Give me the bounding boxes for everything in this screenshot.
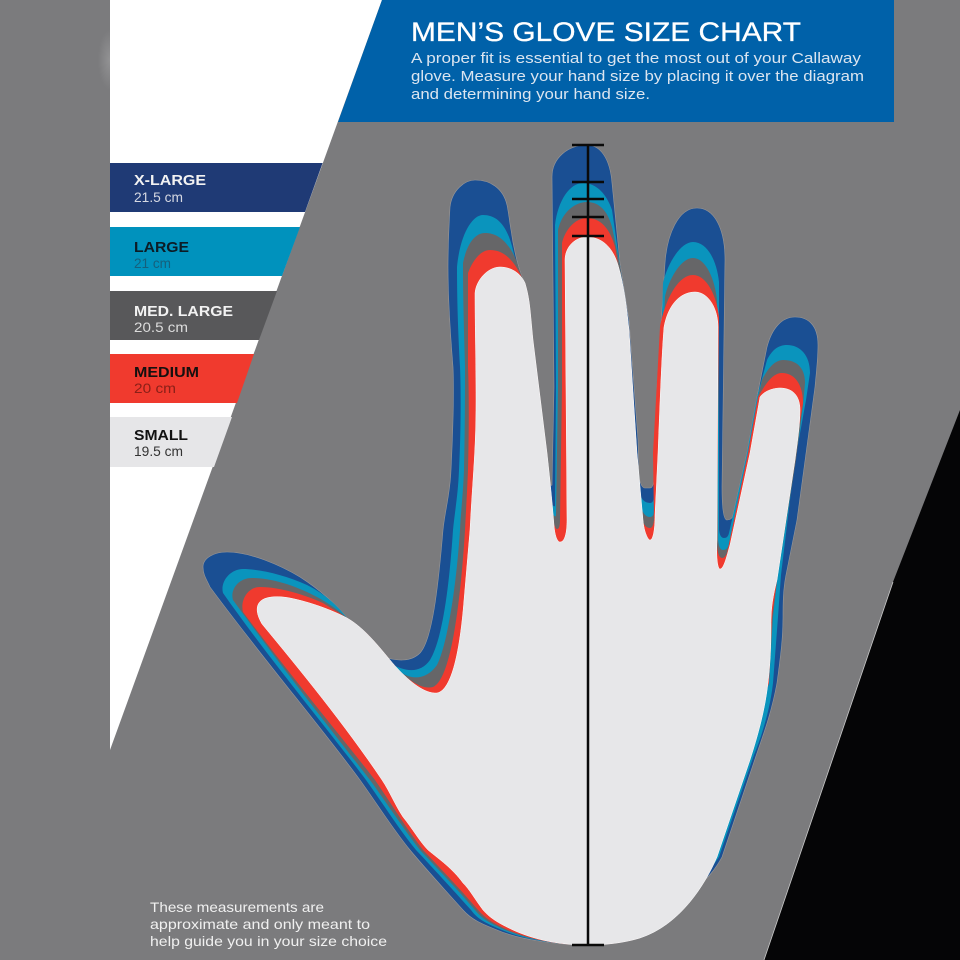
hand outline: medium — [242, 218, 803, 945]
footnote: These measurements are — [150, 899, 324, 915]
white slanted panel — [110, 0, 382, 750]
legend: x-large: 21.5 cm — [134, 189, 183, 205]
legend: x-large: X-LARGE — [134, 172, 206, 189]
legend: med. large: MED. LARGE — [134, 303, 233, 320]
title: MEN’S GLOVE SIZE CHART — [411, 17, 801, 47]
intro text: glove. Measure your hand size by placing it over the diagram — [411, 68, 864, 85]
hand outline: medium large — [232, 202, 805, 945]
hand outline: large — [222, 183, 810, 945]
hand outline: small — [257, 237, 800, 945]
footnote: approximate and only meant to — [150, 916, 370, 932]
footnote — [150, 899, 387, 949]
legend: large — [110, 227, 300, 276]
legend: small: SMALL — [134, 427, 188, 444]
hand diagram — [203, 145, 818, 945]
intro text — [411, 50, 864, 103]
legend: med. large: 20.5 cm — [134, 319, 188, 335]
legend: large: 21 cm — [134, 255, 171, 271]
hand outline: x-large — [203, 145, 818, 945]
legend: medium: MEDIUM — [134, 364, 199, 381]
measuring line with size ticks — [572, 145, 604, 945]
intro text: A proper fit is essential to get the most out of your Callaway — [411, 50, 862, 67]
legend: small — [110, 417, 232, 467]
legend: medium — [110, 354, 254, 403]
legend: large: LARGE — [134, 239, 189, 256]
header banner — [338, 0, 894, 122]
intro text: and determining your hand size. — [411, 86, 650, 103]
legend: med. large — [110, 291, 277, 340]
size legend — [110, 163, 323, 467]
legend: x-large — [110, 163, 323, 212]
footnote: help guide you in your size choice — [150, 933, 387, 949]
black corner — [764, 410, 960, 960]
legend: small: 19.5 cm — [134, 443, 183, 459]
legend: medium: 20 cm — [134, 380, 176, 396]
